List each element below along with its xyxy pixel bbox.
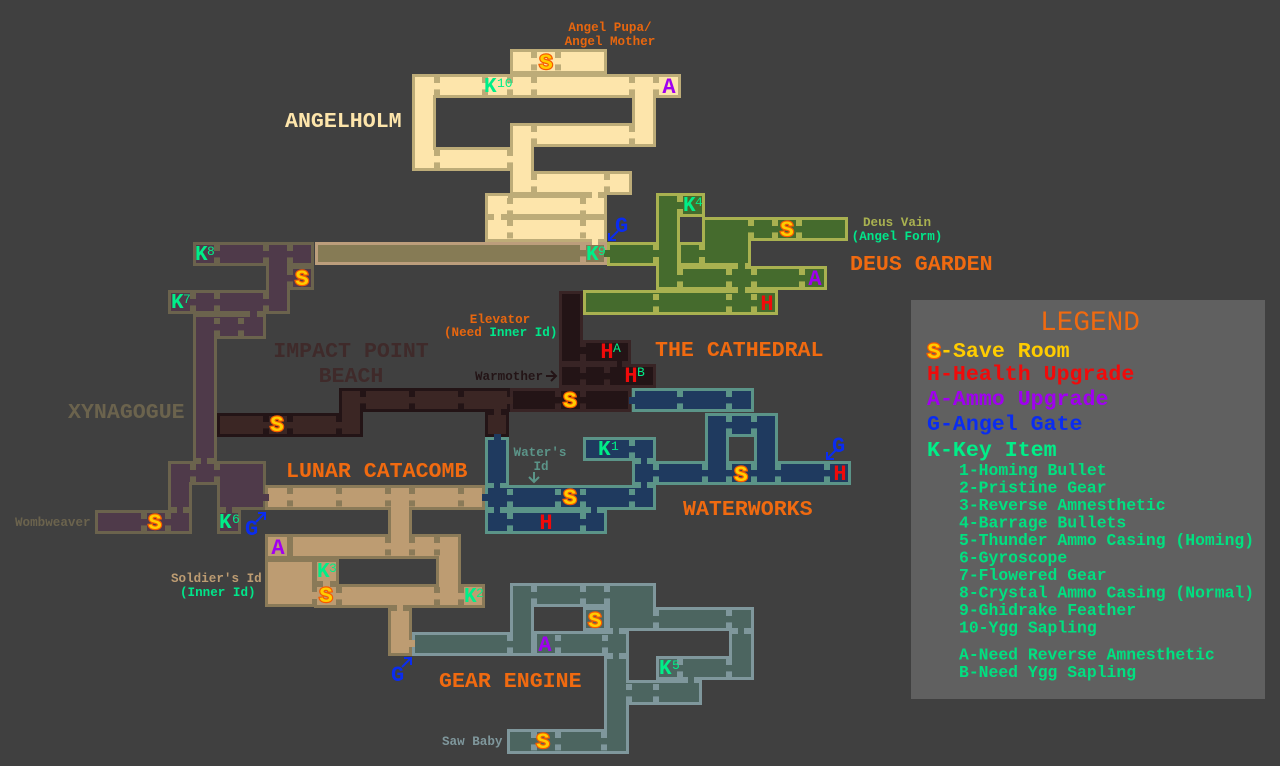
save room markers: S	[539, 50, 553, 76]
save room markers: S	[563, 388, 577, 414]
boss and location annotations: (Inner Id)	[180, 586, 256, 600]
region titles: IMPACT POINT	[273, 340, 429, 364]
save room markers	[148, 50, 794, 755]
legend: key item list: 9-Ghidrake Feather	[959, 601, 1136, 620]
key item markers: 7	[183, 292, 191, 307]
save room markers: S	[563, 485, 577, 511]
boss and location annotations: Deus Vain	[863, 216, 931, 230]
key item markers: 6	[232, 512, 240, 527]
save room markers: S	[588, 608, 602, 634]
region titles: ANGELHOLM	[285, 110, 402, 134]
panel: gear engine map region	[415, 586, 751, 751]
region titles: GEAR ENGINE	[439, 670, 582, 694]
legend: health upgrade: H-Health Upgrade	[927, 363, 1134, 387]
region titles: BEACH	[319, 365, 383, 389]
angel gate markers with arrows: G	[615, 214, 628, 239]
angel gate markers with arrows: G	[832, 434, 845, 459]
legend: ammo upgrade: A-Ammo Upgrade	[927, 388, 1108, 412]
key item markers: K	[484, 76, 497, 99]
panel: waterworks map region	[488, 391, 848, 531]
legend: key item list: A-Need Reverse Amnesthetic	[959, 646, 1215, 664]
legend: key item list: 10-Ygg Sapling	[959, 618, 1097, 638]
boss and location annotations: Water's	[514, 446, 566, 460]
legend: key item list: 2-Pristine Gear	[959, 478, 1107, 498]
arrow: water's id	[529, 472, 539, 482]
health upgrade markers: H	[760, 292, 774, 317]
key item markers: K	[171, 292, 184, 315]
panel: corridor between xynagogue and deus garden	[318, 244, 604, 262]
panel: angelholm map region	[415, 52, 678, 239]
legend: save room: -Save Room	[940, 340, 1070, 364]
key item markers: 8	[207, 244, 215, 259]
panel: the cathedral map region	[513, 294, 653, 409]
ammo upgrade markers	[271, 75, 822, 658]
region titles: WATERWORKS	[683, 498, 813, 522]
key item markers: K	[659, 658, 672, 681]
boss and location annotations: Wombweaver	[15, 516, 91, 530]
key item markers: 9	[598, 244, 606, 259]
key item markers: 4	[695, 195, 703, 210]
angel gate markers with arrows: G	[245, 517, 258, 542]
health upgrade markers: H	[600, 340, 614, 365]
ammo upgrade markers: A	[662, 75, 676, 100]
boss and location annotations: Saw Baby	[442, 735, 503, 749]
health upgrade markers: H	[624, 364, 638, 389]
legend: key item list: 8-Crystal Ammo Casing (Normal)	[959, 584, 1254, 602]
key item markers: K	[598, 439, 611, 462]
save room markers: S	[734, 462, 748, 488]
legend: key item: K-Key Item	[927, 439, 1057, 463]
legend: angel gate: G-Angel Gate	[927, 413, 1083, 437]
key item markers: K	[464, 586, 477, 609]
boss and location annotations: Angel Mother	[565, 35, 655, 49]
health upgrade markers: H	[539, 511, 553, 536]
region titles: DEUS GARDEN	[850, 253, 993, 277]
boss and location annotations: Elevator	[470, 313, 530, 327]
panel: legend	[911, 300, 1265, 699]
key item markers: 5	[672, 658, 680, 673]
panel: lunar catacomb map region	[268, 488, 482, 653]
panel: deus garden map region	[586, 196, 845, 312]
legend: key item list: 5-Thunder Ammo Casing (Homing)	[959, 531, 1254, 550]
legend: key item list: 6-Gyroscope	[959, 548, 1067, 568]
legend: key item list	[959, 461, 1254, 682]
boss and location annotations: (Need Inner Id)	[444, 326, 557, 340]
legend: key item list: 7-Flowered Gear	[959, 566, 1107, 585]
key item markers: K	[195, 244, 208, 267]
angel gate markers with arrows: G	[391, 663, 404, 688]
health upgrade markers	[539, 292, 847, 536]
key item markers: 2	[476, 586, 484, 601]
ammo upgrade markers: A	[808, 267, 822, 292]
ammo upgrade markers: A	[538, 633, 552, 658]
legend: key item list: 1-Homing Bullet	[959, 461, 1107, 480]
ammo upgrade markers: A	[271, 536, 285, 561]
key item markers: 10	[497, 76, 513, 91]
save room markers: S	[536, 729, 550, 755]
key item markers: K	[317, 561, 330, 584]
legend: key item list: 4-Barrage Bullets	[959, 514, 1126, 532]
boss and location annotations: (Angel Form)	[852, 230, 942, 244]
boss and location annotations: Warmother	[475, 370, 543, 384]
arrow: warmother	[546, 371, 556, 381]
legend: save room: S	[927, 339, 941, 365]
boss and location annotations: Soldier's Id	[171, 572, 262, 586]
key item markers: K	[683, 195, 696, 218]
region titles: THE CATHEDRAL	[655, 339, 823, 363]
boss and location annotations: Angel Pupa/	[568, 21, 652, 35]
boss and location annotations	[15, 21, 942, 749]
panel: impact point beach map region	[220, 391, 507, 434]
save room markers: S	[270, 412, 284, 438]
save room markers: S	[148, 510, 162, 536]
save room markers: S	[295, 266, 309, 292]
connecting doors between regions	[263, 239, 635, 647]
legend heading: LEGEND	[1040, 308, 1140, 339]
save room markers: S	[319, 583, 333, 609]
region titles: LUNAR CATACOMB	[286, 460, 467, 484]
health upgrade markers: H	[833, 462, 847, 487]
panel: xynagogue map region	[98, 245, 311, 531]
save room markers: S	[780, 217, 794, 243]
key item markers: K	[586, 244, 599, 267]
health upgrade markers: B	[637, 365, 645, 380]
key item markers: 3	[329, 561, 337, 576]
key item markers	[171, 76, 703, 681]
region titles: XYNAGOGUE	[68, 401, 185, 425]
boss and location annotations: Id	[533, 460, 549, 474]
key item markers: 1	[611, 439, 619, 454]
key item markers: K	[219, 512, 232, 535]
angel gate markers with arrows	[245, 214, 845, 688]
legend: key item list: 3-Reverse Amnesthetic	[959, 496, 1166, 515]
health upgrade markers: A	[613, 341, 621, 356]
legend: key item list: B-Need Ygg Sapling	[959, 663, 1136, 682]
region titles	[68, 110, 993, 694]
